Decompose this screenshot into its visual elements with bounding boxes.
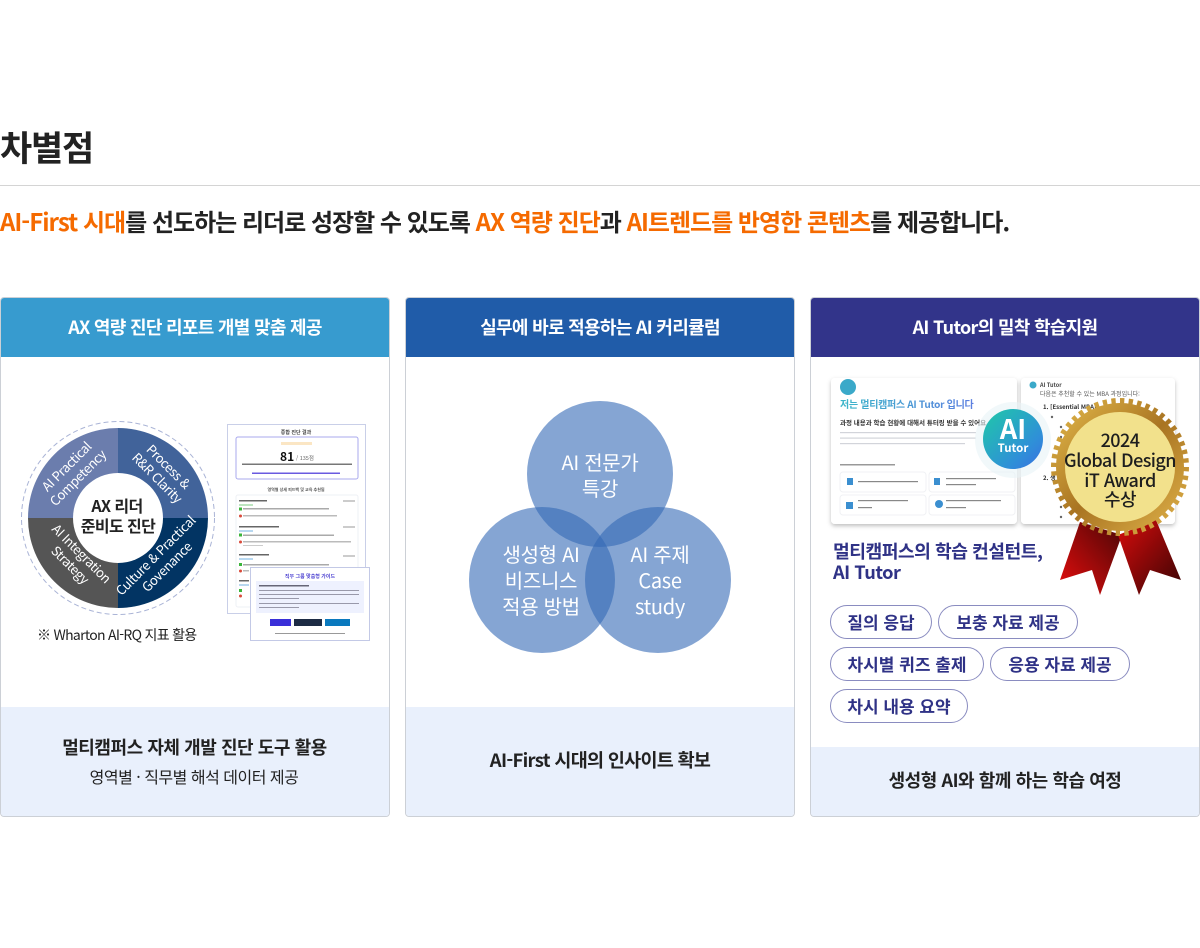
donut chart: AX readiness: Govenance xyxy=(137,537,196,596)
panel footer xyxy=(1,707,389,816)
tutor screenshots and award badge: 다음은 추천할 수 있는 MBA 과정입니다: xyxy=(1040,389,1140,398)
feature tag xyxy=(830,647,984,681)
footer heading: 멀티캠퍼스 자체 개발 진단 도구 활용 xyxy=(62,734,327,760)
tutor screenshots and award badge: 2024 xyxy=(1101,427,1140,453)
venn diagram: 적용 방법 xyxy=(502,591,580,620)
panel footer: 생성형 AI와 함께 하는 학습 여정 xyxy=(889,767,1121,793)
venn diagram: AI 전문가 xyxy=(561,447,639,476)
donut chart: AX readiness: Competency xyxy=(45,444,110,510)
donut chart: AX readiness: AI Integration xyxy=(48,519,116,587)
donut footnote: ※ Wharton AI-RQ 지표 활용 xyxy=(37,625,196,645)
donut chart: AX readiness: Culture & Practical xyxy=(111,510,200,599)
panel footer xyxy=(811,747,1199,816)
feature tag xyxy=(990,647,1130,681)
tutor caption: AI Tutor xyxy=(833,559,900,585)
donut chart: AX readiness xyxy=(21,421,215,615)
tutor screenshots and award badge xyxy=(828,378,1189,595)
report thumbnail: 종합 진단 결과 xyxy=(281,429,312,436)
panel: AI Tutor xyxy=(810,297,1200,817)
panel heading: AX 역량 진단 리포트 개별 맞춤 제공 xyxy=(68,314,322,340)
tutor screenshots and award badge: Global Design xyxy=(1064,447,1176,473)
tutor screenshots and award badge: 1. [Essential MBA] xyxy=(1043,402,1096,411)
tutor screenshots and award badge: AI Tutor xyxy=(1039,381,1062,389)
feature tag: 질의 응답 xyxy=(847,609,915,634)
feature tag: 보충 자료 제공 xyxy=(956,609,1060,634)
title: 차별점 xyxy=(0,121,93,172)
venn diagram: AI 주제 xyxy=(631,539,689,568)
panel heading: AI Tutor의 밀착 학습지원 xyxy=(913,314,1097,340)
tutor screenshots and award badge: 저는 멀티캠퍼스 AI Tutor 입니다 xyxy=(840,396,973,411)
tutor caption xyxy=(833,538,1042,585)
donut chart: AX readiness: R&R Clarity xyxy=(128,448,188,507)
footer sub text: 영역별 · 직무별 해석 데이터 제공 xyxy=(90,764,298,788)
tutor screenshots and award badge: 2. 생 xyxy=(1043,473,1056,482)
venn diagram: 비즈니스 xyxy=(505,565,577,594)
report thumbnail: / 135점 xyxy=(296,454,314,462)
tutor screenshots and award badge: Tutor xyxy=(998,440,1029,456)
feature tag: 응용 자료 제공 xyxy=(1008,651,1112,676)
donut chart: AX readiness: Strategy xyxy=(47,541,94,588)
subtitle: AI-First 시대를 선도하는 리더로 성장할 수 있도록 AX 역량 진단과 AI트렌드를 반영한 콘텐츠를 제공합니다. xyxy=(0,203,1009,238)
donut chart: AX readiness: AI Practical xyxy=(37,436,96,495)
tutor screenshots and award badge: AI xyxy=(999,408,1026,447)
venn diagram xyxy=(469,401,731,653)
tutor screenshots and award badge: 과정 내용과 학습 현황에 대해서 튜터링 받을 수 있어요. xyxy=(840,417,988,427)
panel: AX diagnostic report xyxy=(0,297,390,817)
feature tag xyxy=(938,605,1078,639)
donut chart: AX readiness: AX 리더 xyxy=(90,493,143,517)
feature tag xyxy=(830,605,932,639)
report thumbnail: 직무 그룹 맞춤형 가이드 xyxy=(285,573,335,580)
panel heading: 실무에 바로 적용하는 AI 커리큘럼 xyxy=(480,314,720,340)
report thumbnail xyxy=(227,424,370,641)
donut chart: AX readiness: 준비도 진단 xyxy=(81,513,156,537)
report thumbnail: 영역별 상세 피드백 및 교육 추천됨 xyxy=(267,486,325,493)
feature tag xyxy=(830,689,968,723)
panel footer xyxy=(406,707,794,816)
venn diagram: 특강 xyxy=(582,473,618,502)
panel footer: AI-First 시대의 인사이트 확보 xyxy=(490,747,710,773)
feature tag: 차시별 퀴즈 출제 xyxy=(848,651,966,676)
feature tag: 차시 내용 요약 xyxy=(847,693,951,718)
venn diagram: Case xyxy=(638,565,682,594)
venn diagram: study xyxy=(635,591,686,620)
tutor screenshots and award badge: 수상 xyxy=(1104,486,1136,512)
panel heading xyxy=(810,297,1200,357)
tutor caption: 멀티캠퍼스의 학습 컨설턴트, xyxy=(833,538,1042,564)
tutor screenshots and award badge: iT Award xyxy=(1084,467,1156,493)
report thumbnail: 81 xyxy=(280,448,294,465)
donut chart: AX readiness: Process & xyxy=(143,440,196,493)
panel: practical curriculum xyxy=(405,297,795,817)
panel heading xyxy=(0,297,390,357)
panel heading xyxy=(405,297,795,357)
venn diagram: 생성형 AI xyxy=(502,539,580,568)
